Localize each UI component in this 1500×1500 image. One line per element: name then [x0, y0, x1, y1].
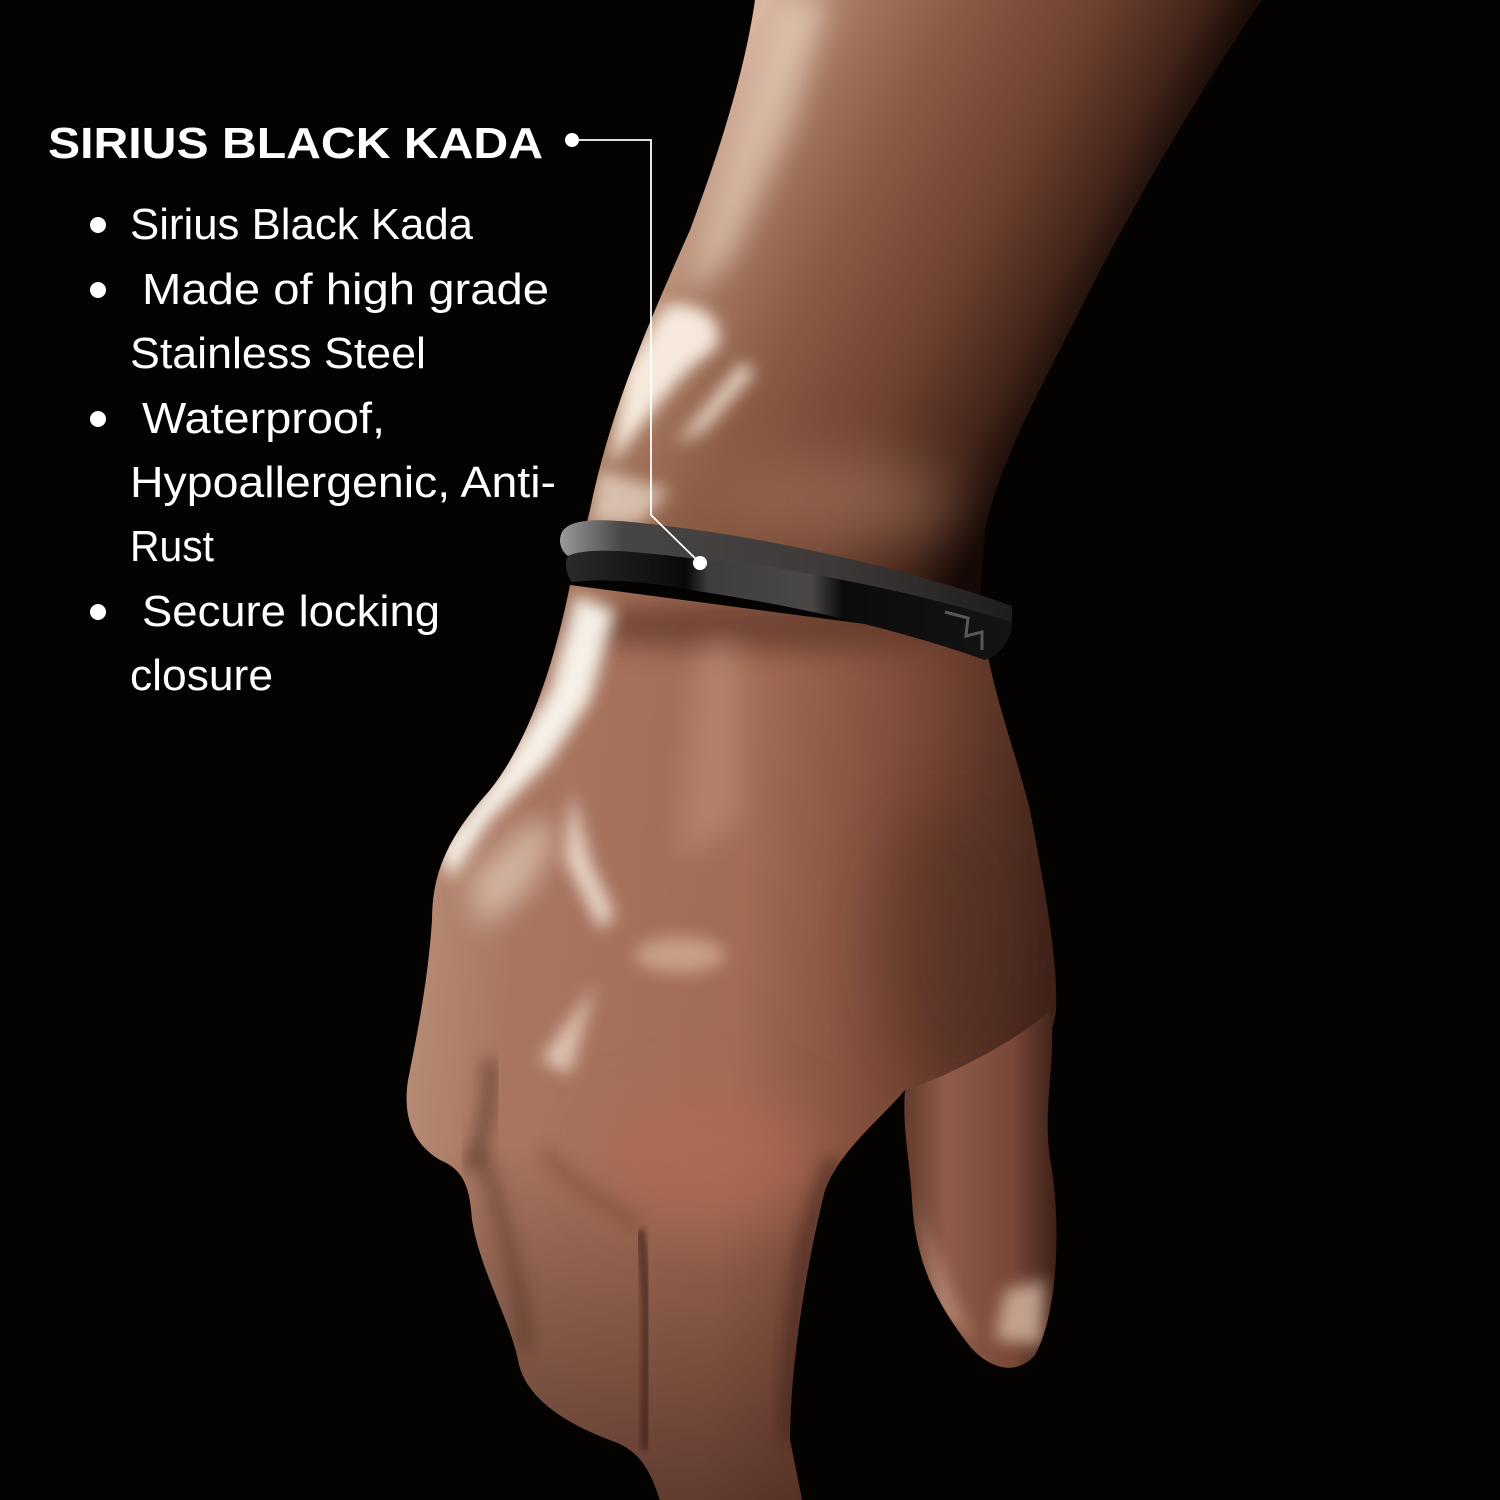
photo: forearm — [579, 0, 1262, 595]
bullet item 3: Waterproof, — [142, 394, 385, 443]
bullet item 4 — [90, 587, 440, 700]
feature list — [90, 200, 556, 700]
callout leader line — [565, 133, 707, 570]
bracelet locking closure — [945, 612, 982, 650]
bullet item 4: closure — [130, 651, 273, 700]
bullet item 2: Made of high grade — [142, 265, 549, 314]
bracelet lower band — [566, 551, 1012, 660]
bullet item 2 — [90, 265, 549, 378]
bullet item 3: Rust — [130, 522, 214, 571]
bullet item 1: Sirius Black Kada — [130, 200, 474, 249]
bracelet upper band — [560, 520, 1012, 622]
photo: back of hand and fingers — [390, 570, 1070, 1500]
photo: black kada bracelet — [560, 520, 1012, 660]
bullet item 2: Stainless Steel — [130, 329, 426, 378]
bullet item 4: Secure locking — [142, 587, 440, 636]
heading: SIRIUS BLACK KADA — [48, 119, 543, 168]
bullet item 3: Hypoallergenic, Anti- — [130, 458, 556, 507]
bullet item 3 — [90, 394, 556, 571]
photo: thumb — [904, 1013, 1056, 1368]
